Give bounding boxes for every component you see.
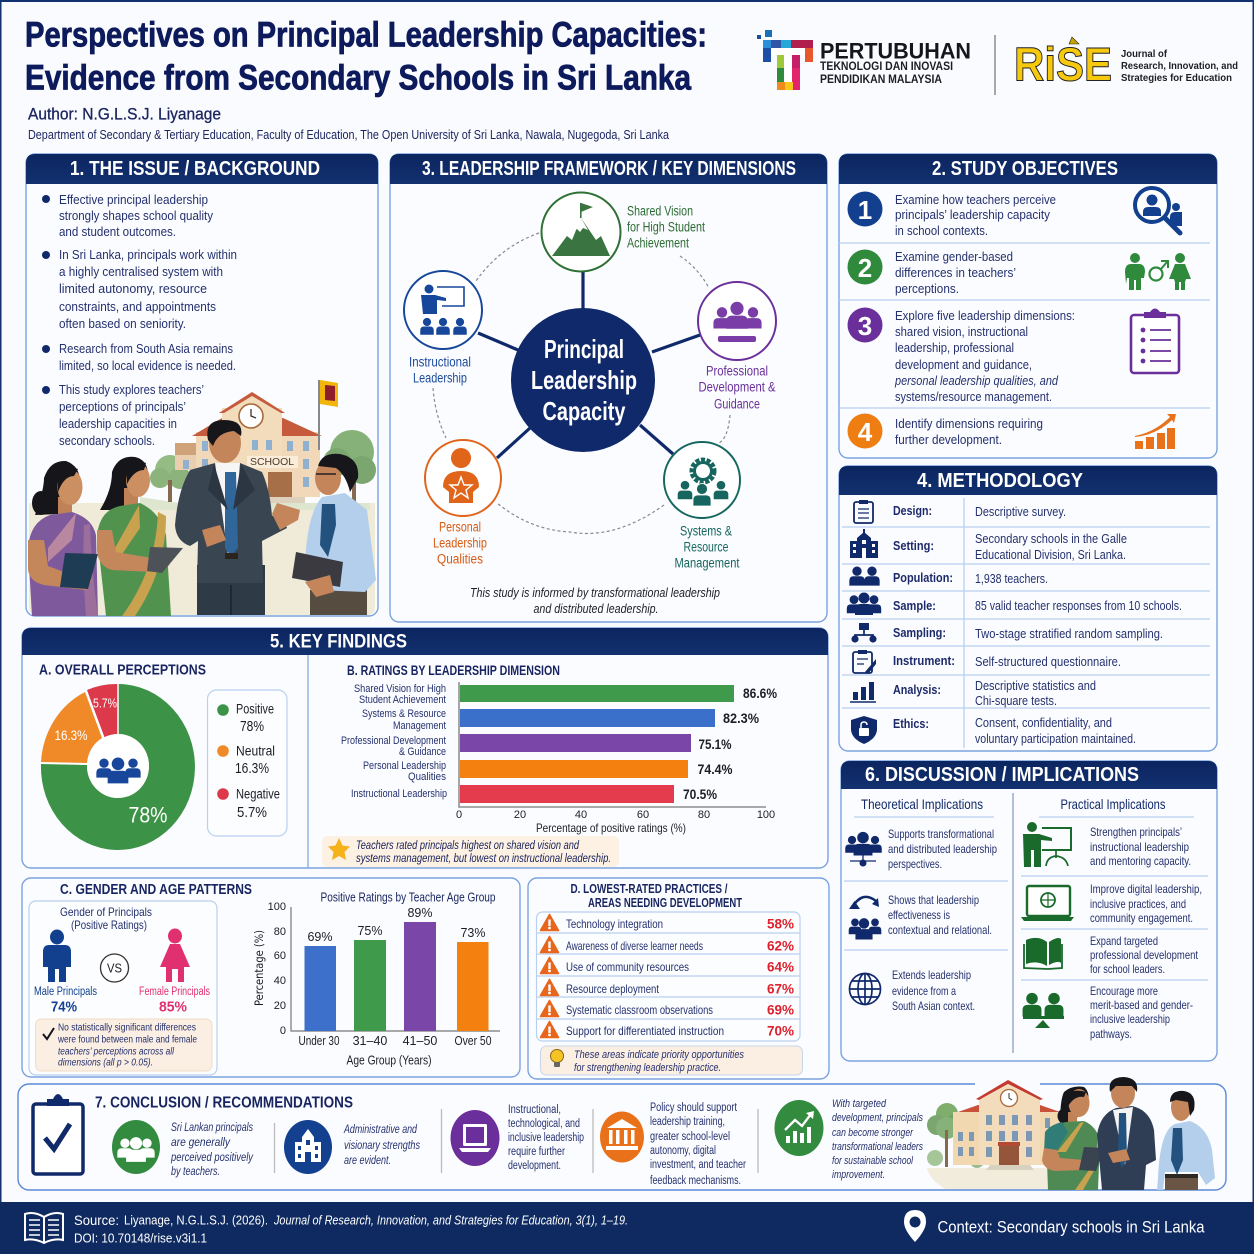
row: sampling: Two-stage stratified random sampling. [975,627,1163,641]
objective 3: personal leadership qualities, and [894,374,1059,388]
source citation: Source: [74,1212,119,1228]
row: setting: Educational Division, Sri Lanka. [975,548,1126,562]
subheading A: A. OVERALL PERCEPTIONS [39,662,206,678]
node: professional development: Guidance [714,396,760,412]
heading: 3. LEADERSHIP FRAMEWORK / KEY DIMENSIONS [422,158,796,180]
man in blue shirt [1157,1091,1215,1190]
row: design: Design: [893,504,932,518]
context: Context: Secondary schools in Sri Lanka [938,1218,1205,1236]
heading: 4. METHODOLOGY [917,470,1084,492]
bar chart: ratings by dimension: Percentage of positive ratings (%) [536,821,686,835]
legend [208,690,287,836]
icon: female figure [160,928,190,982]
bar chart: ratings by dimension: 70.5% [683,786,717,802]
objective 1: in school contexts. [895,224,988,238]
bar chart: ratings by dimension: 100 [757,809,775,821]
objective 4: 4 [858,417,873,447]
node: shared vision [542,192,705,272]
bullet list: secondary schools. [59,434,155,448]
conclusion item 1: Sri Lankan principals [171,1122,253,1134]
bar chart: ratings by dimension: 40 [575,809,587,821]
row: ethics: Ethics: [893,717,929,731]
bar chart: ratings by age group [252,890,500,1068]
objective 1: 1 [858,195,872,225]
heading: 2. STUDY OBJECTIVES [932,158,1118,180]
heading [570,882,742,910]
bar chart: ratings by age group: Positive Ratings by Teacher Age Group [320,890,496,904]
conclusion item 5: can become stronger [832,1127,914,1139]
theoretical implications: Theoretical Implications [861,796,983,812]
bullet list: a highly centralised system with [59,265,223,279]
bar chart: ratings by age group: 73% [460,926,486,940]
bar chart: ratings by age group: Under 30 [298,1034,340,1048]
principal in suit [1097,1077,1156,1190]
gender comparison box: Female Principals [139,986,210,998]
practical implications: merit-based and gender- [1090,998,1193,1012]
footer bar [0,1202,1254,1254]
panel: C gender and age patterns [22,878,520,1077]
logo: RISE journal: Research, Innovation, and [1121,60,1238,72]
row: analysis: Analysis: [893,683,941,697]
source citation [74,1212,628,1246]
practice table: 70% [767,1024,794,1038]
bar chart: ratings by dimension: 20 [514,809,526,821]
bar chart: ratings by dimension: 86.6% [743,685,777,701]
objective 3: development and guidance, [895,358,1032,372]
bar chart: ratings by dimension: 82.3% [723,710,759,726]
theoretical implications: evidence from a [892,984,956,998]
practice table: Systematic classroom observations [566,1003,713,1017]
bullet list: In Sri Lanka, principals work within [59,248,237,262]
conclusion item 5 [774,1098,923,1181]
logo: Pertubuhan: PENDIDIKAN MALAYSIA [820,74,942,86]
row: ethics: voluntary participation maintained. [975,732,1136,746]
gender comparison box: Gender of Principals [60,905,152,919]
note: no significant differences: No statistically significant differences [58,1022,196,1034]
theoretical implications: and distributed leadership [888,842,997,856]
row: sampling: Sampling: [893,626,946,640]
bar chart: ratings by age group: Over 50 [454,1034,492,1048]
objective 1: Examine how teachers perceive [895,193,1056,207]
legend: Negative [236,786,280,802]
conclusion item 1: are generally [171,1137,231,1149]
bar chart: ratings by age group: 31–40 [353,1034,387,1048]
practice table: Resource deployment [566,982,660,996]
legend: 16.3% [235,761,269,777]
icon: gender figures [1125,253,1191,290]
practice table: 64% [767,960,794,974]
icon: male figure [43,930,71,982]
note: no significant differences [36,1019,212,1071]
row: analysis: Descriptive statistics and [975,679,1096,693]
bar chart: ratings by dimension: Instructional Leadership [351,788,447,800]
node: professional development: Professional [706,364,768,378]
row: population [849,567,1048,586]
panel: 4 methodology [839,466,1217,751]
vs badge [100,954,128,982]
note: no significant differences: teachers’ perceptions across all [58,1046,175,1058]
conclusion item 4: feedback mechanisms. [650,1175,741,1187]
conclusion item 2 [284,1120,420,1174]
callout: priority opportunities: for strengthening leadership practice. [574,1062,721,1074]
icon: clipboard checklist [1131,308,1179,373]
bullet list: strongly shapes school quality [59,209,214,223]
legend: Positive [236,702,274,716]
center circle [511,308,655,452]
practice table: 58% [767,916,794,932]
practical implications: professional development [1090,948,1199,962]
panel: 1 the issue / background [26,154,378,616]
logo: Pertubuhan: TEKNOLOGI DAN INOVASI [820,61,953,73]
bar chart: ratings by dimension: 75.1% [698,736,732,752]
objective 2 [848,250,1191,296]
bar chart: ratings by dimension: Management [393,720,446,732]
woman in green sari [97,457,183,616]
row: sampling [851,623,1163,643]
practical implications: inclusive practices, and [1090,897,1186,911]
row: instrument: Self-structured questionnaire. [975,655,1121,669]
bar chart: ratings by age group: 89% [407,906,433,920]
icon: open book [25,1213,63,1243]
heading: 5. KEY FINDINGS [270,632,407,652]
framework diagram [404,192,776,570]
node: professional development [698,282,776,412]
center circle: Principal [544,334,624,364]
conclusion item 5: improvement. [832,1169,885,1181]
practical implications: instructional leadership [1090,840,1189,854]
illustration: principal with teachers at school [28,380,376,616]
subheading B: B. RATINGS BY LEADERSHIP DIMENSION [347,662,560,678]
practical implications: and mentoring capacity. [1090,854,1191,868]
donut chart: 78% [128,802,168,828]
bar chart: ratings by age group: 75% [357,924,383,938]
heading: C. GENDER AND AGE PATTERNS [60,882,252,898]
objective 4: Identify dimensions requiring [895,417,1043,431]
practical implications: inclusive leadership [1090,1012,1170,1026]
principal in suit [175,420,300,615]
illustration: school and leaders [927,1077,1215,1190]
bullet list [42,193,237,448]
panel: 3 leadership framework [390,154,827,622]
logo: RISE journal: Strategies for Education [1121,72,1232,84]
legend: 5.7% [237,805,267,821]
icon: network of people [845,832,882,866]
bullet list: often based on seniority. [59,317,186,331]
practice table: 67% [767,982,794,996]
practice table: 69% [767,1002,794,1018]
objective 2: 2 [858,253,872,283]
logo: Pertubuhan [757,30,971,90]
bar chart: ratings by age group: 0 [280,1025,286,1037]
woman in purple sari [28,461,98,616]
legend: 78% [240,719,264,735]
bar chart: ratings by dimension: & Guidance [399,746,446,758]
source citation: Journal of Research, Innovation, and Strategies for Education, 3(1), 1–19. [273,1212,628,1228]
objective 2: differences in teachers’ [895,266,1016,280]
callout: priority opportunities: These areas indicate priority opportunities [574,1049,744,1061]
row: instrument [853,650,1121,674]
node: personal leadership qualities [425,440,501,566]
objective 2: Examine gender-based [895,250,1013,264]
logo: RISE journal: Journal of [1121,48,1167,60]
author: Author: N.G.L.S.J. Liyanage [28,104,221,124]
conclusion item 4: Policy should support [650,1102,738,1114]
row: sample [847,592,1182,615]
bar chart: ratings by age group: 60 [274,950,286,962]
practical implications: community engagement. [1090,911,1193,925]
bar chart: ratings by age group: 100 [268,901,286,913]
row: sample: Sample: [893,599,936,613]
bullet list: This study explores teachers’ [59,383,204,397]
panel: 2 study objectives [839,154,1217,458]
node: personal leadership qualities: Leadership [433,536,487,550]
bullet list: limited autonomy, resource [59,282,207,296]
gender comparison box: 74% [51,998,77,1016]
bullet list: Effective principal leadership [59,193,208,207]
node: systems and resource management: Systems & [680,524,732,538]
bullet list: limited, so local evidence is needed. [59,359,236,373]
woman in green sari [1042,1087,1104,1190]
bar chart: ratings by dimension: 80 [698,809,710,821]
theoretical implications: effectiveness is [888,908,950,922]
conclusion item 3: inclusive leadership [508,1132,584,1144]
affiliation: Department of Secondary & Tertiary Education, Faculty of Education, The Open University of Sri Lanka, Nawala, Nugegoda, Sri Lanka [28,128,669,142]
callout: key takeaway: Teachers rated principals highest on shared vision and [356,840,579,852]
panel: 6 discussion / implications [841,761,1217,1061]
objective 3: leadership, professional [895,341,1014,355]
heading: 1. THE ISSUE / BACKGROUND [70,158,320,180]
heading: AREAS NEEDING DEVELOPMENT [588,896,742,910]
node: systems and resource management: Management [674,556,740,570]
bar chart: ratings by dimension [341,682,777,835]
conclusion item 1: by teachers. [171,1166,220,1178]
practice table: 62% [767,938,794,954]
icon: location pin [904,1210,926,1242]
bar chart: ratings by age group: Percentage (%) [252,930,266,1006]
heading: D. LOWEST-RATED PRACTICES / [570,882,728,896]
icon: laptop with globe [1021,886,1074,921]
gender comparison box: Male Principals [34,986,97,998]
bar chart: ratings by age group: 69% [307,930,333,944]
center circle: Leadership [531,365,637,395]
theoretical implications: Shows that leadership [888,893,979,907]
bar chart: ratings by age group: 20 [274,1000,286,1012]
logo: Pertubuhan: PERTUBUHAN [820,38,971,64]
conclusion item 2: Administrative and [343,1124,417,1136]
conclusion item 5: With targeted [832,1098,887,1110]
bar chart: ratings by dimension: Systems & Resource [362,708,446,720]
heading: 7. CONCLUSION / RECOMMENDATIONS [95,1094,353,1112]
row: setting: Secondary schools in the Galle [975,532,1127,546]
node: instructional leadership [404,271,482,386]
gender comparison box: 85% [159,998,187,1016]
icon: relational cycle [849,897,881,940]
conclusion item 1: perceived positively [170,1152,254,1164]
node: instructional leadership: Leadership [413,370,467,386]
row: analysis: Chi-square tests. [975,694,1057,708]
framework note: and distributed leadership. [534,602,658,616]
theoretical implications: Supports transformational [888,827,994,841]
objective 2: perceptions. [895,282,959,296]
row: sample: 85 valid teacher responses from 10 schools. [975,599,1182,613]
vs badge: VS [107,960,122,976]
icon: magnifier with person [1135,188,1182,233]
row: analysis [850,679,1096,708]
bullet list: leadership capacities in [59,417,177,431]
title: Perspectives on Principal Leadership Capacities: [25,16,707,54]
man with folder [292,454,376,615]
node: shared vision: for High Student [627,220,705,234]
gender comparison box: (Positive Ratings) [71,918,147,932]
bar chart: ratings by dimension: Student Achievement [359,694,446,706]
row: population: Population: [893,571,953,585]
theoretical implications: South Asian context. [892,999,975,1013]
practical implications: Practical Implications [1060,796,1166,812]
row: setting: Setting: [893,539,934,553]
conclusion item 3: development. [508,1160,561,1172]
icon: growth chart [1135,414,1176,449]
framework note [470,586,720,616]
conclusion item 4: investment, and teacher [650,1159,746,1171]
practical implications: Expand targeted [1090,934,1158,948]
practice table: Awareness of diverse learner needs [566,939,703,953]
objective 3: 3 [858,311,872,341]
callout: priority opportunities [540,1046,802,1075]
conclusion item 4: greater school-level [650,1131,730,1143]
bullet list: perceptions of principals’ [59,400,186,414]
source citation: DOI: 10.70148/rise.v3i1.1 [74,1230,207,1246]
practice table: Support for differentiated instruction [566,1024,724,1038]
node: shared vision: Achievement [627,236,689,250]
bar chart: ratings by age group: 41–50 [403,1034,437,1048]
node: systems and resource management: Resource [684,540,728,554]
bar chart: ratings by age group: 40 [274,975,286,987]
donut chart [41,684,195,850]
conclusion item 5: transformational leaders [832,1141,923,1153]
practical implications: Strengthen principals’ [1090,825,1182,839]
bar chart: ratings by dimension: Qualities [408,771,446,783]
practical implications: Encourage more [1090,984,1158,998]
row: setting [850,529,1127,562]
objective 3 [848,308,1179,404]
node: instructional leadership: Instructional [409,354,471,370]
theoretical implications [845,796,997,1013]
conclusion item 1 [112,1120,254,1178]
conclusion item 4: autonomy, digital [650,1145,716,1157]
conclusion item 4 [600,1102,746,1187]
node: professional development: Development & [698,380,776,394]
panel: 5 key findings [22,628,828,868]
conclusion item 3: Instructional, [508,1104,561,1116]
node: shared vision: Shared Vision [627,204,693,218]
practical implications: Improve digital leadership, [1090,882,1202,896]
icon: globe [850,974,880,1004]
donut chart: 5.7% [93,696,117,710]
note: no significant differences: were found between male and female [57,1034,197,1046]
bullet list: Research from South Asia remains [59,342,233,356]
gender comparison box [29,901,217,1075]
practice table [536,912,800,1041]
bar chart: ratings by age group: Age Group (Years) [346,1052,432,1068]
logo: RISE journal [995,35,1238,95]
source citation: Liyanage, N.G.L.S.J. (2026). [124,1212,268,1228]
heading: 6. DISCUSSION / IMPLICATIONS [865,764,1139,786]
row: instrument: Instrument: [893,654,955,668]
icon: two people on balance [1023,993,1064,1028]
conclusion item 3 [450,1104,584,1172]
practical implications: for school leaders. [1090,962,1165,976]
icon: open book [1024,938,1062,969]
theoretical implications: perspectives. [888,857,942,871]
panel: D lowest-rated practices [528,878,829,1079]
bar chart: ratings by dimension: Shared Vision for High [354,683,446,695]
bar chart: ratings by dimension: 74.4% [698,761,733,777]
bar chart: ratings by dimension: 60 [637,809,649,821]
note: no significant differences: dimensions (all p > 0.05). [58,1058,153,1068]
donut chart: 16.3% [54,727,88,743]
bar chart: ratings by age group: 80 [274,926,286,938]
row: population: 1,938 teachers. [975,572,1048,586]
bullet list: and student outcomes. [59,225,176,239]
conclusion item 2: visionary strengths [344,1140,420,1152]
practice table: Technology integration [566,917,663,931]
illustration: principal with teachers at school: SCHOOL [250,456,294,468]
objective 3: systems/resource management. [895,390,1052,404]
legend: Neutral [236,744,275,758]
conclusion item 4: leadership training, [650,1116,725,1128]
node: personal leadership qualities: Qualities [437,552,483,566]
bar chart: ratings by dimension: 0 [456,809,462,821]
theoretical implications: contextual and relational. [888,923,992,937]
objective 4 [848,414,1176,449]
logo: RISE journal: RiSE [1014,38,1112,90]
objective 3: Explore five leadership dimensions: [895,309,1075,323]
title: Evidence from Secondary Schools in Sri Lanka [25,58,691,98]
bar chart: ratings by dimension: Professional Development [341,735,446,747]
node: systems and resource management [664,442,740,570]
panel: 7 conclusion / recommendations [18,1077,1226,1190]
objective 1: principals’ leadership capacity [895,208,1051,222]
title [25,16,707,98]
objective 1 [848,188,1182,238]
conclusion item 2: are evident. [344,1155,391,1167]
objective 3: shared vision, instructional [895,325,1028,339]
theoretical implications: Extends leadership [892,968,971,982]
node: personal leadership qualities: Personal [439,520,481,534]
practical implications: pathways. [1090,1027,1132,1041]
row: ethics [851,716,1136,746]
row: design [854,500,1066,523]
icon: clipboard with check [33,1094,83,1174]
bullet list: constraints, and appointments [59,300,216,314]
conclusion item 5: development, principals [832,1112,923,1124]
bar chart: ratings by dimension: Personal Leadership [363,760,446,772]
practice table: Use of community resources [566,960,689,974]
objective 4: further development. [895,433,1002,447]
conclusion item 5: for sustainable school [832,1155,913,1167]
row: design: Descriptive survey. [975,505,1066,519]
center circle: Capacity [542,396,626,426]
framework note: This study is informed by transformational leadership [470,586,720,600]
conclusion item 3: technological, and [508,1118,580,1130]
row: ethics: Consent, confidentiality, and [975,716,1112,730]
icon: presenter at board [1023,822,1072,867]
callout: key takeaway [322,836,619,867]
practical implications [1021,796,1202,1041]
conclusion item 3: require further [508,1146,565,1158]
callout: key takeaway: systems management, but lowest on instructional leadership. [356,853,611,865]
